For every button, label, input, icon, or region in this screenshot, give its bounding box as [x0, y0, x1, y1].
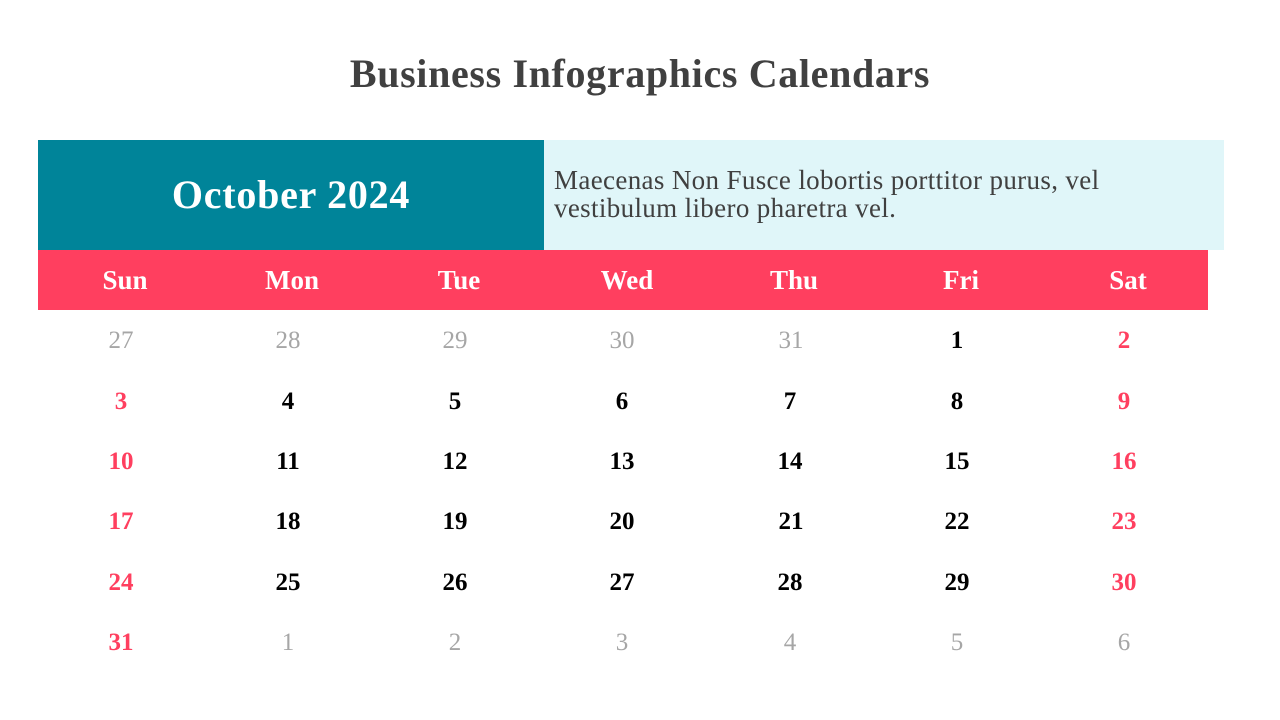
calendar dates: 16 [1112, 448, 1136, 475]
calendar dates: 5 [449, 388, 461, 415]
calendar dates: 14 [778, 448, 802, 475]
calendar dates: 6 [616, 388, 628, 415]
weekday header [38, 250, 1208, 310]
description panel: vestibulum libero pharetra vel. [554, 193, 896, 223]
calendar dates: 25 [276, 569, 300, 596]
calendar dates: 15 [944, 448, 970, 475]
calendar dates: 28 [778, 569, 802, 596]
calendar dates: 3 [616, 629, 628, 656]
calendar dates: 7 [784, 388, 796, 415]
calendar dates: 31 [108, 629, 134, 656]
calendar dates: 2 [1118, 327, 1130, 354]
weekday header: Wed [601, 265, 653, 295]
calendar dates: 2 [449, 629, 461, 656]
description panel: Maecenas Non Fusce lobortis porttitor purus, vel [554, 165, 1099, 195]
calendar dates: 30 [1112, 569, 1136, 596]
calendar dates: 1 [282, 629, 294, 656]
calendar dates: 24 [108, 569, 134, 596]
description panel [544, 140, 1224, 250]
calendar dates: 12 [442, 448, 468, 475]
calendar dates: 10 [108, 448, 134, 475]
calendar dates: 5 [951, 629, 963, 656]
month banner: October 2024 [172, 172, 410, 217]
calendar dates: 20 [610, 508, 634, 535]
calendar dates: 27 [108, 327, 134, 354]
calendar dates: 19 [442, 508, 468, 535]
calendar dates: 31 [778, 327, 804, 354]
calendar dates: 1 [951, 327, 963, 354]
calendar dates: 11 [276, 448, 300, 475]
calendar dates: 18 [276, 508, 300, 535]
calendar dates: 29 [442, 327, 468, 354]
weekday header: Fri [943, 265, 979, 295]
calendar dates: 13 [610, 448, 634, 475]
month banner [38, 140, 544, 250]
calendar dates: 21 [778, 508, 804, 535]
weekday header: Sat [1109, 265, 1147, 295]
calendar dates: 6 [1118, 629, 1130, 656]
calendar dates: 30 [610, 327, 634, 354]
weekday header: Thu [770, 265, 818, 295]
calendar dates: 4 [784, 629, 796, 656]
calendar dates: 9 [1118, 388, 1130, 415]
calendar dates: 28 [276, 327, 300, 354]
title: Business Infographics Calendars [350, 51, 930, 96]
calendar dates: 26 [442, 569, 468, 596]
calendar dates: 17 [108, 508, 134, 535]
calendar dates: 22 [944, 508, 970, 535]
calendar dates [108, 327, 1136, 656]
weekday header: Mon [265, 265, 319, 295]
calendar dates: 4 [282, 388, 294, 415]
calendar dates: 3 [115, 388, 127, 415]
calendar dates: 23 [1112, 508, 1136, 535]
calendar dates: 29 [944, 569, 970, 596]
weekday header: Sun [102, 265, 148, 295]
calendar dates: 27 [610, 569, 634, 596]
calendar dates: 8 [951, 388, 963, 415]
weekday header: Tue [438, 265, 480, 295]
